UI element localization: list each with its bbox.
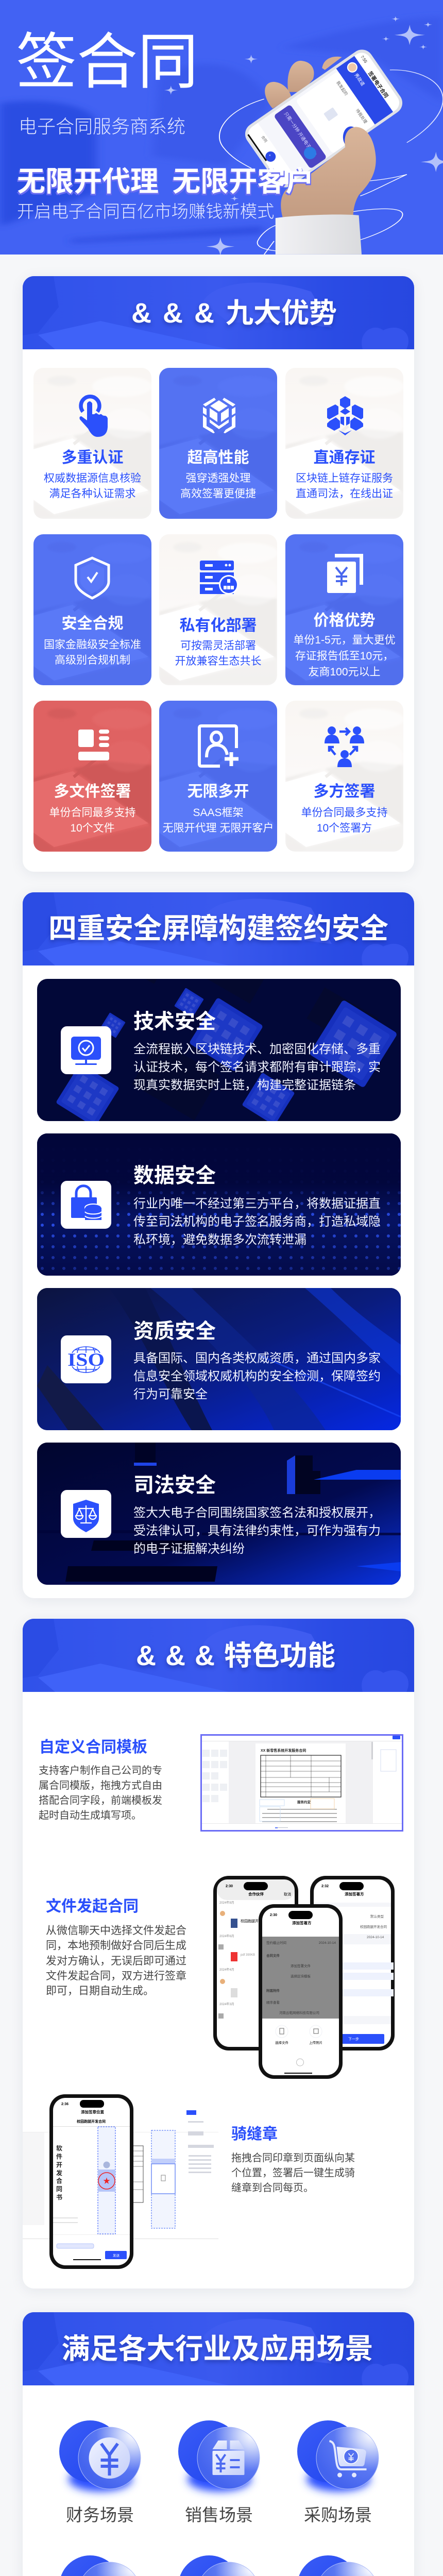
tile: security compliance — [33, 534, 151, 685]
tile: private deployment: 开放兼容生态共长 — [175, 655, 262, 667]
illustration: three phones: 顺序查看 — [266, 2000, 280, 2005]
tile: price advantage: 单份1-5元，量大更优 — [293, 634, 396, 646]
illustration: three phones: pdf 390KB — [241, 1954, 255, 1957]
tile: direct evidence storage: 区块链上链存证服务 — [296, 472, 393, 484]
heading: industry scenarios: 满足各大行业及应用场景 — [61, 2333, 373, 2365]
illustration: three phones: 校园跑腿开发合同 — [360, 1924, 387, 1929]
tile: unlimited instances: 无限开代理 无限开客户 — [163, 822, 274, 834]
panel: data security: 行业内唯一不经过第三方平台，将数据证据直 — [133, 1197, 381, 1211]
illustration: seam seal phone and document: 软 — [56, 2144, 62, 2152]
illustration: three phones: 上传照片 — [309, 2040, 322, 2045]
illustration: seam seal phone and document: 同 — [56, 2185, 62, 2193]
illustration: three phones: 选择区块模板 — [291, 1974, 311, 1978]
illustration: three phones: 合同文件 — [266, 1953, 280, 1958]
illustration: three phones: 2024年6月 — [219, 1934, 234, 1938]
illustration: seam seal phone and document: 2:36 — [61, 2103, 69, 2106]
feature text: custom template: 起时自动生成填写项。 — [39, 1810, 142, 1821]
icon: business — [299, 2555, 374, 2576]
illustration: three phones: 附属附件 — [266, 1988, 280, 1993]
panel: qualification security — [37, 1288, 401, 1430]
panel: technical security: 全流程嵌入区块链技术、加密固化存储、多重 — [133, 1042, 381, 1056]
illustration: hand holding phone with stars and orbits: 7:55 — [360, 55, 368, 64]
panel: four layer security — [23, 892, 414, 1598]
panel: technical security: 技术安全 — [133, 1010, 216, 1033]
tile: direct evidence storage: 直通存证 — [313, 449, 375, 466]
feature text: initiate from file: 文件发起合同，双方进行签章 — [46, 1970, 186, 1982]
tile: multi party signing: 多方签署 — [313, 783, 375, 800]
illustration: seam seal phone and document: 校园跑腿开发合同 — [77, 2119, 106, 2124]
feature text: initiate from file: 发对方确认，无误后即可通过 — [46, 1955, 186, 1967]
feature heading: seam seal: 骑缝章 — [231, 2126, 278, 2143]
panel: industry scenarios — [23, 2312, 414, 2576]
illustration: seam seal phone and document: 发 — [56, 2169, 62, 2177]
tile: private deployment: 可按需灵活部署 — [180, 640, 256, 652]
panel: qualification security: 具备国际、国内各类权威资质，通过国内多家 — [133, 1351, 381, 1365]
illustration: three phones: 2024年8月 — [219, 1901, 234, 1905]
tile: price advantage — [285, 534, 403, 685]
icon: ISO globe: ISO — [67, 1349, 105, 1370]
feature heading: initiate from file: 文件发起合同 — [46, 1898, 139, 1915]
illustration: three phones: 2024-10-14 — [319, 1941, 336, 1945]
label: finance: 财务场景 — [66, 2505, 134, 2524]
feature text: custom template: 属合同模版，拖拽方式自由 — [39, 1780, 162, 1791]
heading: nine advantages — [23, 276, 414, 349]
illustration: seam seal phone and document: 添加签章位置 — [81, 2109, 104, 2114]
panel: data security — [37, 1133, 401, 1276]
illustration: three phones: 2:30 — [226, 1885, 233, 1888]
illustration: hand holding phone with stars and orbits — [0, 16, 443, 255]
panel: nine advantages — [23, 276, 414, 872]
illustration: hand holding phone with stars and orbits: 我发起的 — [335, 80, 349, 96]
screenshot: template editor — [200, 1734, 403, 1832]
tile: unlimited instances: 无限多开 — [188, 783, 249, 800]
panel: judicial security — [37, 1443, 401, 1585]
subtitle: 电子合同服务商系统 — [19, 116, 185, 137]
illustration: three phones — [213, 1876, 395, 2079]
illustration: three phones: 合作伙伴 — [248, 1891, 264, 1896]
tile: unlimited instances: SAAS框架 — [193, 807, 244, 819]
panel: judicial security: 司法安全 — [133, 1474, 216, 1497]
illustration: hand holding phone with stars and orbits: 合同 — [260, 134, 268, 143]
panel: judicial security: 签大大电子合同围绕国家签名法和授权展开， — [133, 1506, 381, 1520]
tile: multi file signing: 10个文件 — [70, 822, 115, 834]
panel: data security: 传至司法机构的电子签名服务商，打造私域隐 — [133, 1215, 381, 1229]
tile: price advantage: 存证报告低至10元， — [295, 650, 394, 662]
tile: multi party signing: 10个签署方 — [317, 822, 372, 834]
tile: high performance — [159, 368, 277, 519]
illustration: three phones: 2:32 — [321, 1885, 329, 1888]
tile: direct evidence storage: 直通司法，在线出证 — [296, 488, 393, 500]
icon: HR — [61, 2555, 136, 2576]
tile: security compliance: 安全合规 — [62, 615, 124, 632]
illustration: seam seal phone and document: ★ — [103, 2177, 110, 2185]
panel: qualification security: 资质安全 — [133, 1320, 216, 1343]
illustration: seam seal phone and document: 书 — [56, 2193, 62, 2201]
illustration: hand holding phone with stars and orbits: 只需一分钟 开通电子合同 — [283, 111, 317, 157]
illustration: hand holding phone with stars and orbits: 签署电子合同 — [367, 70, 390, 99]
illustration: three phones: 添加签署文件 — [291, 1963, 311, 1968]
feature heading: custom template: 自定义合同模板 — [39, 1739, 147, 1756]
tile: multi authentication — [33, 368, 151, 519]
icon: sales — [178, 2420, 260, 2499]
label: sales: 销售场景 — [185, 2505, 253, 2524]
tile: private deployment — [159, 534, 277, 685]
tile: security compliance: 国家金融级安全标准 — [44, 639, 141, 651]
icon: scales shield — [61, 1490, 111, 1538]
tile: unlimited instances — [159, 701, 277, 852]
illustration: three phones: 选择文件 — [275, 2040, 288, 2045]
tile: multi authentication: 权威数据源信息核验 — [44, 472, 141, 484]
panel: qualification security: 信息安全领域权威机构的安全检测，保障签约 — [133, 1369, 381, 1383]
illustration: three phones: 添加签署方 — [292, 1920, 312, 1925]
tile: multi file signing — [33, 701, 151, 852]
heading: featured functions: & & & 特色功能 — [136, 1640, 335, 1671]
label: procurement: 采购场景 — [304, 2505, 372, 2524]
illustration: seam seal phone and document: 发送 — [113, 2253, 120, 2258]
heading: featured functions — [23, 1619, 414, 1692]
feature text: seam seal: 缝章到合同每页。 — [231, 2182, 314, 2194]
slogan: 无限开代理 无限开客户 — [17, 165, 314, 197]
illustration: three phones: 校园跑腿开发 — [241, 1919, 262, 1923]
illustration: three phones: 签约截止时间 — [266, 1940, 286, 1945]
panel: technical security: 现真实数据实时上链，构建完整证据链条 — [133, 1078, 356, 1092]
feature text: initiate from file: 即可，日期自动生成。 — [46, 1985, 154, 1997]
panel: judicial security: 受法律认可，具有法律约束性，可作为强有力 — [133, 1524, 381, 1538]
feature text: custom template — [39, 1765, 162, 1821]
illustration: seam seal phone and document: 合 — [56, 2177, 62, 2184]
tile: high performance: 高效签署更便捷 — [180, 488, 256, 500]
illustration: three phones: 2024年3月 — [219, 2002, 234, 2006]
tile: multi file signing: 单份合同最多支持 — [49, 807, 136, 819]
illustration: three phones: 下一步 — [348, 2037, 359, 2041]
heading: four layer security — [23, 892, 414, 965]
feature text: seam seal — [231, 2153, 355, 2194]
illustration: three phones: 添加签署方 — [345, 1891, 364, 1896]
title: 签合同 — [16, 28, 198, 96]
panel: qualification security: 行为可靠安全 — [133, 1387, 208, 1401]
tile: high performance: 超高性能 — [188, 449, 249, 466]
icon: monitor check — [61, 1026, 111, 1074]
feature text: seam seal: 拖拽合同印章到页面纵向某 — [231, 2153, 355, 2164]
screenshot: template editor: 服务约定 — [297, 1800, 311, 1804]
tagline: 开启电子合同百亿市场赚钱新模式 — [17, 202, 274, 222]
heading: industry scenarios — [23, 2312, 414, 2385]
panel: featured functions — [23, 1619, 414, 2289]
feature text: custom template: 支持客户制作自己公司的专 — [39, 1765, 162, 1776]
feature text: initiate from file: 同，本地预制做好合同后生成 — [46, 1940, 186, 1952]
heading: four layer security: 四重安全屏障构建签约安全 — [48, 912, 388, 944]
tile: price advantage: 价格优势 — [313, 612, 375, 629]
panel: hero banner — [0, 0, 443, 255]
icon: ISO globe — [61, 1335, 111, 1383]
illustration: hand holding phone with stars and orbits: 秀政道 — [353, 72, 366, 87]
panel: technical security — [37, 979, 401, 1121]
tile: multi file signing: 多文件签署 — [54, 783, 131, 800]
illustration: three phones: 河南云乾网络科技有限公司 — [279, 2010, 319, 2015]
feature text: initiate from file — [46, 1925, 186, 1997]
tile: multi authentication: 多重认证 — [62, 449, 124, 466]
tile: private deployment: 私有化部署 — [179, 617, 257, 634]
icon: logistics — [180, 2555, 254, 2576]
tile: price advantage: 友商100元以上 — [308, 666, 381, 678]
illustration: seam seal phone and document — [23, 2094, 218, 2269]
panel: technical security: 认证技术，每个签名请求都附有审计跟踪，实 — [133, 1060, 381, 1074]
panel: judicial security: 的电子证据解决纠纷 — [133, 1542, 245, 1556]
feature text: custom template: 搭配合同字段，前端模板发 — [39, 1795, 162, 1806]
icon: procurement — [297, 2420, 379, 2499]
tile: high performance: 强穿透强处理 — [185, 472, 250, 484]
illustration: seam seal phone and document: 件 — [56, 2153, 62, 2160]
icon: lock and database — [61, 1181, 111, 1229]
icon: finance — [59, 2420, 141, 2499]
illustration: three phones: 默认类型 — [370, 1914, 384, 1919]
tile: direct evidence storage — [285, 368, 403, 519]
heading: nine advantages: & & & 九大优势 — [131, 298, 337, 329]
illustration: three phones: 2024年4月 — [219, 1968, 234, 1972]
feature text: seam seal: 个位置，签署后一键生成骑 — [231, 2167, 355, 2179]
illustration: hand holding phone with stars and orbits: + — [267, 154, 271, 157]
illustration: three phones: 2:30 — [270, 1913, 277, 1917]
illustration: three phones: 取消 — [284, 1892, 291, 1896]
illustration: three phones: 2024-10-14 — [367, 1936, 384, 1939]
tile: multi party signing — [285, 701, 403, 852]
tile: security compliance: 高级别合规机制 — [55, 654, 130, 666]
tile: multi party signing: 单份合同最多支持 — [301, 807, 387, 819]
illustration: seam seal phone and document: 开 — [56, 2161, 62, 2168]
panel: data security: 数据安全 — [133, 1164, 216, 1187]
illustration: hand holding phone with stars and orbits: 待我处理 — [355, 108, 368, 124]
tile: multi authentication: 满足各种认证需求 — [49, 488, 136, 500]
panel: data security: 私环境，避免数据多次流转泄漏 — [133, 1233, 306, 1247]
feature text: initiate from file: 从微信聊天中选择文件发起合 — [46, 1925, 186, 1937]
screenshot: template editor: XX 新零售系统开发服务合同 — [261, 1748, 306, 1753]
